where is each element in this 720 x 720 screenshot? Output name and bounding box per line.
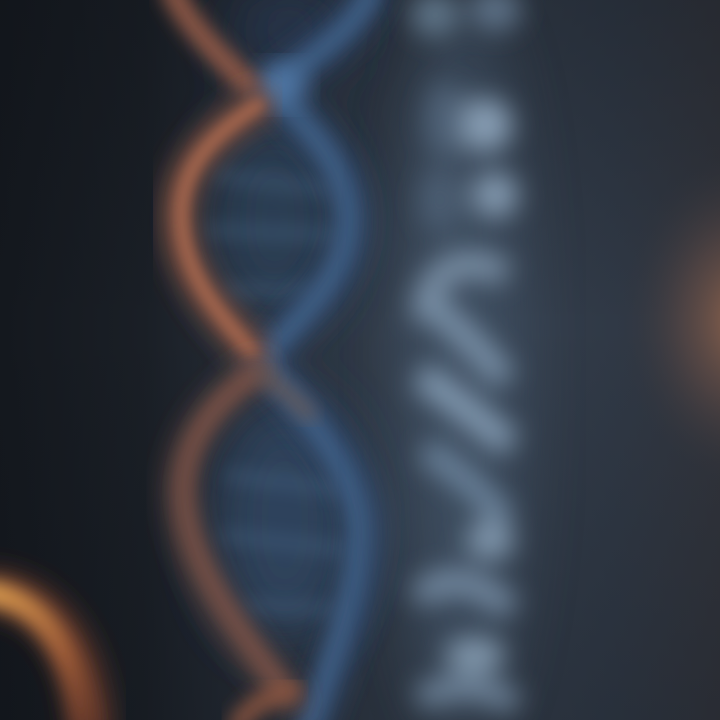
orange arc: bottom left [0, 590, 92, 720]
blue DNA strand [258, 0, 372, 720]
rungs between strands [205, 175, 350, 610]
orange glow: right edge [620, 150, 720, 490]
pale blue helix column [400, 0, 524, 720]
orange DNA strand [172, 0, 310, 720]
helix interior haze [205, 0, 360, 645]
